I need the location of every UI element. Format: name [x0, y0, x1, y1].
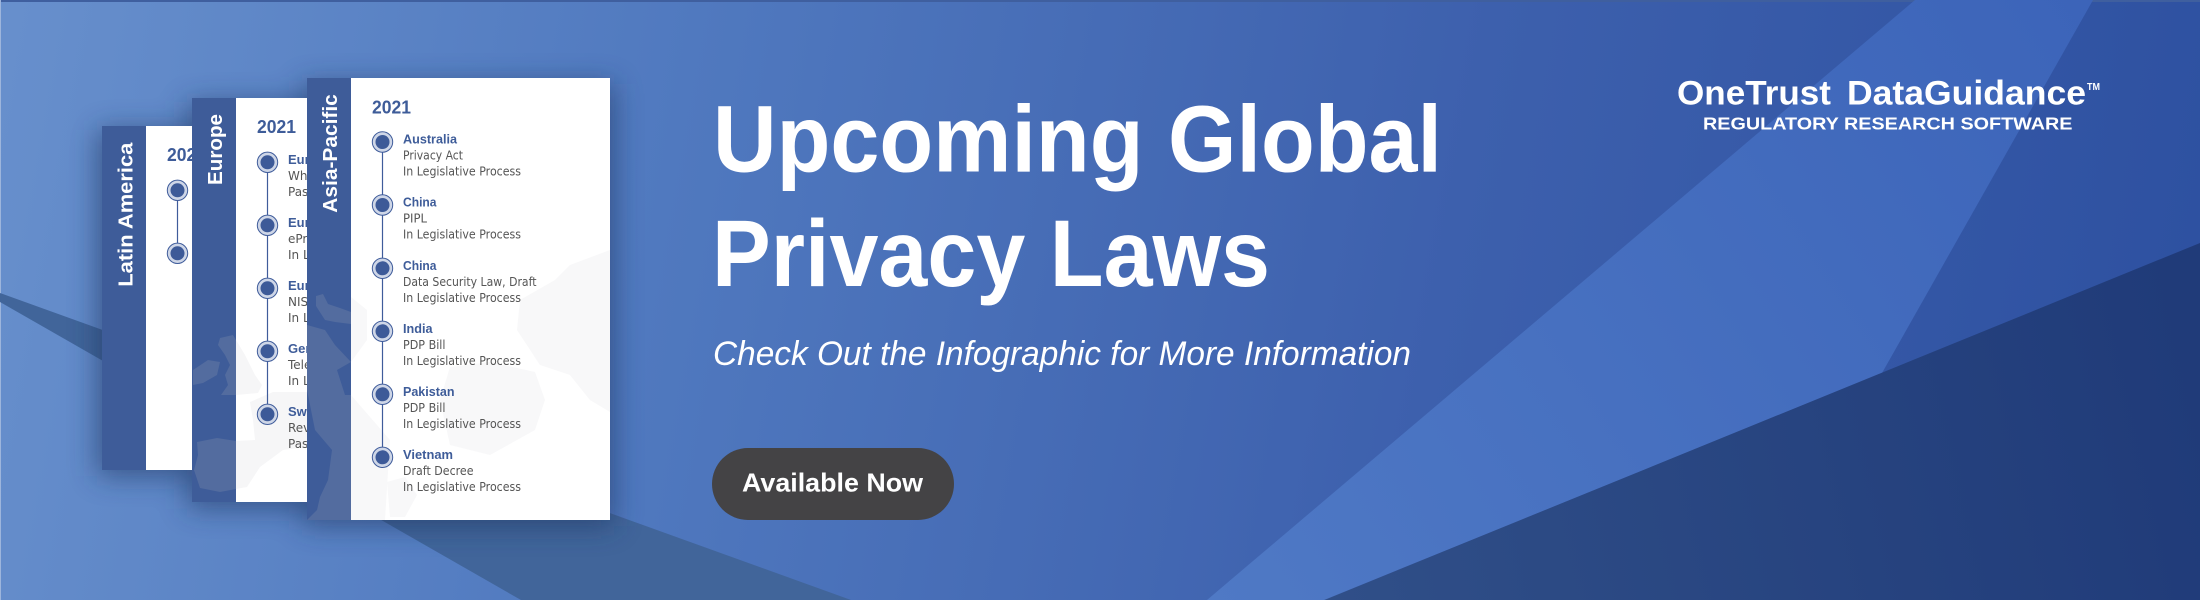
Europe map — [193, 335, 307, 492]
title — [712, 87, 1442, 307]
Latin America timeline — [167, 180, 188, 264]
subtitle: Check Out the Infographic for More Information — [713, 335, 1411, 373]
diagonal light band — [1207, 0, 2093, 600]
entry: Vietnam — [403, 447, 521, 494]
entry: India: India — [403, 321, 433, 336]
Europe timeline text: In L — [288, 374, 310, 388]
Europe timeline text: Pas — [288, 437, 308, 451]
dark corner polygon — [1324, 243, 2200, 600]
entry: China Data Security Law: Data Security Law, Draft — [403, 275, 537, 289]
card shadow — [97, 84, 614, 526]
Europe timeline text: Eur — [288, 215, 310, 230]
Europe timeline text — [287, 152, 311, 451]
Europe timeline text: Ger — [288, 341, 310, 356]
top edge strip — [0, 0, 2200, 2]
entry: Pakistan: PDP Bill — [403, 401, 446, 415]
entry: China Data Security Law: China — [403, 258, 437, 273]
Europe timeline — [257, 152, 278, 424]
entry: Australia: Australia — [403, 132, 458, 147]
logo: OneTrust DataGuidance — [1677, 74, 2100, 133]
Europe year: 2021 — [257, 116, 296, 137]
Asia-Pacific side band — [307, 78, 351, 520]
entry: Pakistan — [403, 384, 521, 431]
left edge strip — [0, 0, 1, 600]
logo: OneTrust DataGuidance: REGULATORY RESEARCH SOFTWARE — [1703, 113, 2072, 133]
Europe side band — [192, 98, 236, 502]
entry: Vietnam: In Legislative Process — [403, 480, 521, 494]
Latin America year: 2021 — [167, 144, 206, 165]
Latin America label: Latin America — [114, 142, 138, 287]
title: Upcoming Global — [713, 87, 1442, 193]
entry: India: In Legislative Process — [403, 354, 521, 368]
entry: Australia: In Legislative Process — [403, 165, 521, 179]
button: Available Now: Available Now — [742, 468, 924, 498]
Europe timeline text: Eur — [288, 152, 310, 167]
entry: Australia — [403, 132, 521, 179]
entry: Vietnam: Vietnam — [403, 447, 453, 462]
Europe timeline text: In L — [288, 311, 310, 325]
logo: OneTrust DataGuidance: OneTrust — [1677, 74, 1832, 112]
entry: China PIPL: PIPL — [403, 212, 427, 226]
entry: Pakistan: In Legislative Process — [403, 417, 521, 431]
panel: Europe — [192, 98, 311, 502]
Asia-Pacific year: 2021 — [372, 96, 411, 117]
Europe timeline text: In L — [288, 248, 310, 262]
Europe timeline text: Wh — [288, 169, 307, 183]
entry: China PIPL — [403, 195, 521, 242]
diagonal dark wedge — [0, 293, 851, 600]
entry: India: PDP Bill — [403, 338, 446, 352]
Europe timeline text: Rev — [288, 421, 310, 435]
Europe label: Europe — [204, 114, 227, 185]
Europe timeline text: Pas — [288, 185, 308, 199]
Asia-Pacific label: Asia-Pacific — [319, 94, 342, 213]
Latin America side band — [102, 126, 146, 470]
Europe timeline text: Tele — [287, 358, 311, 372]
Asia-Pacific timeline — [372, 132, 393, 468]
entry: India — [403, 321, 521, 368]
panel: Asia-Pacific — [307, 78, 610, 520]
entry: China Data Security Law — [403, 258, 537, 305]
entry: China Data Security Law: In Legislative Process — [403, 291, 521, 305]
panel: Latin America — [102, 126, 206, 470]
Europe timeline text: NIS — [288, 295, 308, 309]
Asia-Pacific map — [307, 294, 351, 520]
logo: OneTrust DataGuidance: TM — [2087, 82, 2100, 93]
entry: China PIPL: China — [403, 195, 437, 210]
Europe timeline text: Swi — [288, 404, 310, 419]
Europe timeline text: Eur — [288, 278, 310, 293]
entry: Vietnam: Draft Decree — [403, 464, 474, 478]
button: Available Now — [712, 448, 954, 520]
entry: Australia: Privacy Act — [403, 149, 463, 163]
entry: Pakistan: Pakistan — [403, 384, 455, 399]
title: Privacy Laws — [712, 201, 1270, 307]
logo: OneTrust DataGuidance: DataGuidance — [1847, 74, 2086, 112]
entry: China PIPL: In Legislative Process — [403, 228, 521, 242]
Europe timeline text: ePr — [288, 232, 307, 246]
